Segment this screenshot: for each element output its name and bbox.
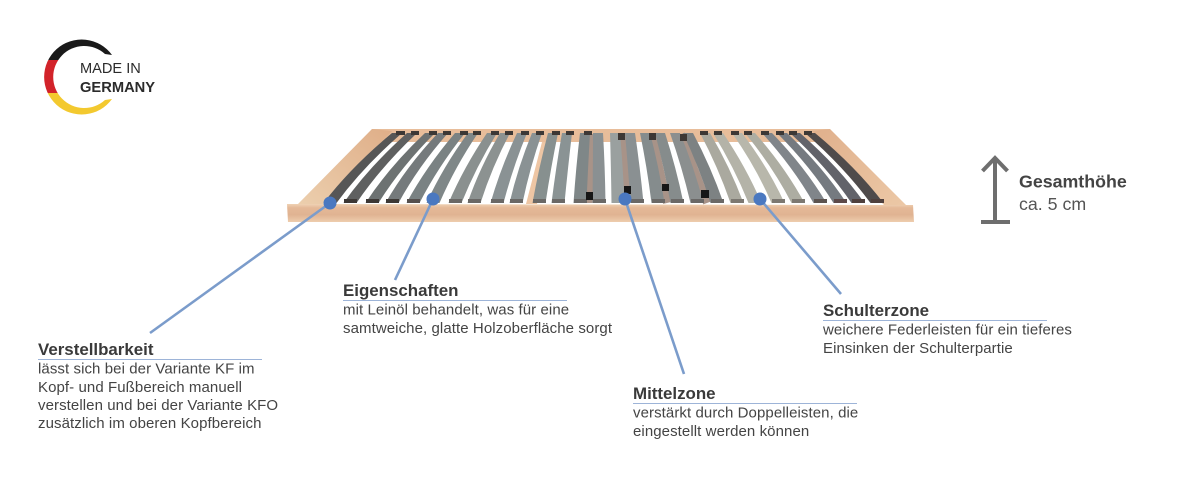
callout: Verstellbarkeit: zusätzlich im oberen Kopfbereich <box>38 415 262 432</box>
callout: Verstellbarkeit: lässt sich bei der Variante KF im <box>38 360 255 378</box>
slat holders: dark end caps and blocks <box>344 131 884 203</box>
logo text: MADE IN <box>80 61 141 77</box>
callout: Verstellbarkeit: Verstellbarkeit <box>38 340 154 359</box>
callout: Schulterzone <box>822 301 1072 357</box>
total height label: Gesamthöhe <box>1019 172 1127 192</box>
callout: Schulterzone: Einsinken der Schulterpartie <box>823 340 1013 357</box>
total height label: ca. 5 cm <box>1019 194 1086 214</box>
callout: Verstellbarkeit <box>38 340 278 432</box>
callout: Eigenschaften <box>343 281 613 337</box>
foot rail <box>287 204 914 222</box>
callout: Mittelzone: verstärkt durch Doppelleisten, die <box>633 404 858 422</box>
logo: Made in Germany <box>44 40 155 114</box>
logo text <box>80 61 155 96</box>
callout: Eigenschaften: mit Leinöl behandelt, was für eine <box>343 302 569 318</box>
double-slat backing strips <box>590 134 707 203</box>
right side rail <box>812 129 906 205</box>
callout pointer lines and dots <box>150 192 841 374</box>
callout: Schulterzone: weichere Federleisten für ein tieferes <box>822 322 1072 338</box>
total height label <box>1019 172 1127 214</box>
centre wood bar <box>526 142 548 204</box>
pointer: Mittelzone <box>618 192 684 374</box>
callout: Verstellbarkeit: Kopf- und Fußbereich manuell <box>38 379 242 396</box>
callout: Verstellbarkeit: verstellen und bei der Variante KFO <box>38 397 278 414</box>
pointer: Schulterzone <box>754 192 841 294</box>
pointer: Eigenschaften <box>395 192 440 280</box>
callout: Mittelzone: Mittelzone <box>633 384 716 403</box>
slatted bed frame <box>287 129 914 222</box>
left side rail <box>297 129 392 205</box>
callout: Eigenschaften: Eigenschaften <box>343 281 458 300</box>
head rail <box>366 129 836 142</box>
icon: German flag ring <box>44 40 112 114</box>
icon: height arrow <box>981 158 1010 222</box>
callout: Schulterzone: Schulterzone <box>823 301 929 320</box>
callout: Mittelzone: eingestellt werden können <box>633 423 809 440</box>
callout: Mittelzone <box>633 384 858 440</box>
logo text: GERMANY <box>80 80 155 96</box>
pointer: Verstellbarkeit <box>150 196 336 333</box>
callout: Eigenschaften: samtweiche, glatte Holzoberfläche sorgt <box>343 320 613 337</box>
spring slats <box>324 133 884 203</box>
